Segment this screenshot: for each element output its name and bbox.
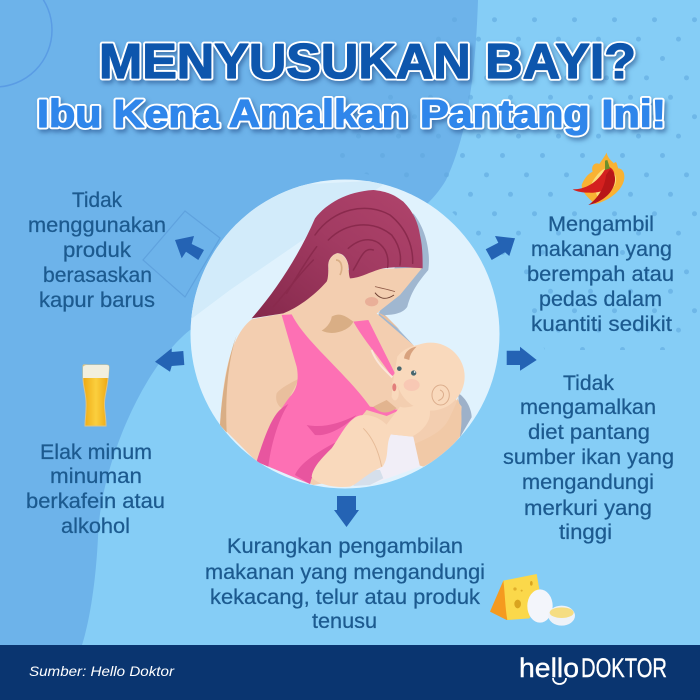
icon: beer glass	[83, 365, 109, 426]
text: kapur barus: menggunakan	[28, 214, 166, 237]
text: berempah: kuantiti sedikit	[531, 313, 672, 336]
icon: chili with flame	[573, 153, 624, 205]
text: berempah	[527, 213, 674, 336]
text: kekacang: Kurangkan pengambilan	[227, 535, 463, 558]
text: kafein: Elak minum	[40, 441, 152, 464]
logo: helloDOKTOR: hello	[519, 653, 579, 683]
text: merkuri	[503, 372, 674, 544]
text: berempah: berempah atau	[527, 263, 674, 286]
logo: helloDOKTOR	[519, 653, 667, 684]
text: kafein	[26, 441, 165, 538]
title: Ibu Kena Amalkan Pantang Ini!	[37, 93, 666, 136]
text: merkuri: mengamalkan	[520, 396, 656, 419]
text: kapur barus: kapur barus	[39, 289, 155, 312]
text: merkuri: Tidak	[563, 372, 614, 395]
arrow: upper right	[486, 236, 515, 260]
icon: cheese and eggs	[490, 574, 575, 626]
text: kapur barus	[28, 189, 166, 312]
text: kapur barus: produk	[63, 239, 132, 262]
text: kapur barus: berasaskan	[43, 264, 152, 287]
text: merkuri: mengandungi	[522, 471, 654, 494]
arrow: upper left	[175, 236, 204, 260]
text: kekacang: makanan yang mengandungi	[205, 561, 485, 584]
text: merkuri: tinggi	[559, 521, 612, 544]
decorative ring	[0, 0, 52, 87]
text: berempah: Mengambil	[548, 213, 654, 236]
text: berempah: pedas dalam	[539, 288, 662, 311]
arrow: left	[155, 348, 184, 372]
title: MENYUSUKAN BAYI?	[99, 35, 636, 89]
text: kafein: minuman	[50, 465, 142, 488]
text: merkuri: sumber ikan yang	[503, 446, 674, 469]
logo: helloDOKTOR: DOKTOR	[581, 653, 667, 683]
central illustration: mother and baby	[190, 180, 500, 488]
text: merkuri: merkuri yang	[524, 497, 652, 520]
text: kafein: alkohol	[61, 515, 130, 538]
title: Ibu Kena Amalkan Pantang Ini!	[37, 93, 666, 136]
text: merkuri: diet pantang	[528, 421, 650, 444]
arrow: down	[334, 496, 359, 527]
footer bar	[0, 645, 700, 700]
text: kekacang: tenusu	[312, 610, 377, 633]
text: kafein: berkafein atau	[26, 490, 165, 513]
title	[37, 35, 666, 136]
decorative diamond	[143, 211, 220, 297]
background blob	[0, 0, 478, 645]
text: kapur barus: Tidak	[72, 189, 122, 212]
text: kekacang	[205, 535, 485, 633]
text: kekacang: kekacang, telur atau produk	[210, 586, 481, 609]
text: berempah: makanan yang	[531, 238, 672, 261]
arrow: right	[507, 347, 537, 371]
title: MENYUSUKAN BAYI?	[99, 35, 636, 89]
source credit: Sumber: Hello Doktor	[29, 663, 175, 679]
dot pattern	[447, 17, 697, 350]
